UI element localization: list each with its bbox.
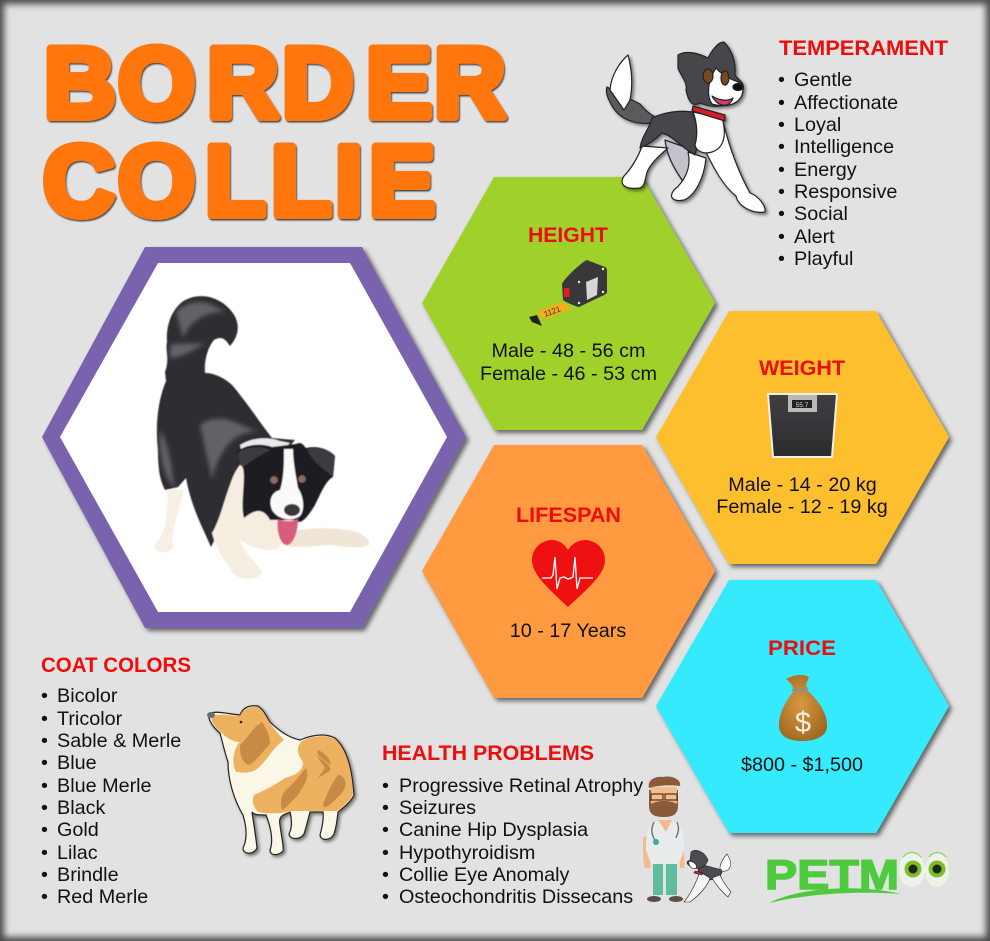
- icon: tape measure: 1121: [543, 304, 562, 319]
- list: coat colors: Blue: [57, 752, 97, 774]
- list: temperament traits: Loyal: [794, 114, 841, 136]
- list: temperament traits: Social: [794, 203, 848, 225]
- health problems: [382, 742, 643, 908]
- list: coat colors: •: [41, 775, 48, 797]
- list: temperament traits: Playful: [794, 248, 853, 270]
- list: health problems: Seizures: [399, 797, 476, 819]
- icon: money bag: $: [795, 707, 811, 739]
- list: temperament traits: Intelligence: [794, 136, 894, 158]
- list: coat colors: •: [41, 886, 48, 908]
- list: health problems: •: [382, 819, 389, 841]
- heading: temperament: TEMPERAMENT: [779, 37, 948, 60]
- text: height female: Female - 46 - 53 cm: [480, 363, 657, 385]
- icon: tape measure: [529, 260, 607, 326]
- logo: petmoo: [765, 851, 949, 903]
- panel: price: [656, 580, 949, 833]
- title: BORDER: [44, 27, 506, 138]
- temperament: [778, 37, 948, 270]
- list: temperament traits: Affectionate: [794, 92, 898, 114]
- icon: heart with pulse: [532, 540, 605, 607]
- logo wordmark: PETM: [765, 851, 899, 898]
- cartoon dog: [606, 42, 765, 212]
- list: coat colors: Gold: [57, 819, 99, 841]
- list: coat colors: Red Merle: [57, 886, 148, 908]
- list: coat colors: Lilac: [57, 842, 98, 864]
- list: health problems: •: [382, 886, 389, 908]
- text: weight male: Male - 14 - 20 kg: [728, 474, 877, 496]
- icon: bathroom scale: [768, 394, 837, 457]
- text: height male: Male - 48 - 56 cm: [492, 340, 645, 362]
- coat colors: [41, 654, 191, 908]
- list: temperament traits: •: [778, 203, 785, 225]
- list: temperament traits: •: [778, 114, 785, 136]
- photo: border collie play bow: [155, 296, 369, 579]
- heading: coat colors: COAT COLORS: [41, 654, 191, 677]
- list: health problems: •: [382, 775, 389, 797]
- list: coat colors: •: [41, 797, 48, 819]
- list: coat colors: Sable & Merle: [57, 730, 181, 752]
- list: coat colors: Tricolor: [57, 708, 123, 730]
- list: health problems: •: [382, 797, 389, 819]
- list: temperament traits: •: [778, 159, 785, 181]
- list: coat colors: Blue Merle: [57, 775, 152, 797]
- panel: lifespan: [422, 445, 715, 698]
- list: temperament traits: Energy: [794, 159, 857, 181]
- icon: bathroom scale: 55.7: [796, 402, 809, 409]
- panel: height: [422, 177, 715, 430]
- text: weight female: Female - 12 - 19 kg: [716, 496, 888, 518]
- list: health problems: Hypothyroidism: [399, 842, 535, 864]
- list: temperament traits: •: [778, 181, 785, 203]
- heading: height: HEIGHT: [528, 224, 608, 247]
- list: temperament traits: •: [778, 136, 785, 158]
- list: temperament traits: Alert: [794, 226, 835, 248]
- list: temperament traits: •: [778, 69, 785, 91]
- illustration: small dog: [684, 850, 731, 902]
- heading: price: PRICE: [768, 637, 836, 660]
- list: coat colors: •: [41, 864, 48, 886]
- title: COLLIE: [43, 125, 435, 236]
- heading: health problems: HEALTH PROBLEMS: [382, 742, 594, 765]
- text: price value: $800 - $1,500: [741, 754, 863, 776]
- panel: weight: [656, 311, 949, 564]
- list: coat colors: •: [41, 819, 48, 841]
- heading: lifespan: LIFESPAN: [516, 504, 621, 527]
- list: temperament traits: Responsive: [794, 181, 897, 203]
- list: health problems: •: [382, 864, 389, 886]
- icon: money bag: [779, 675, 827, 741]
- list: coat colors: •: [41, 685, 48, 707]
- illustration: sable collie: [207, 706, 354, 855]
- list: temperament traits: •: [778, 226, 785, 248]
- title: [43, 27, 506, 236]
- list: coat colors: •: [41, 730, 48, 752]
- logo eyes: [899, 852, 949, 887]
- list: health problems: Progressive Retinal Atrophy: [399, 775, 643, 797]
- list: temperament traits: [778, 69, 898, 270]
- list: coat colors: [41, 685, 181, 908]
- panel: photo hexagon: [42, 247, 466, 628]
- illustration: vet: [643, 777, 684, 902]
- list: temperament traits: Gentle: [794, 69, 852, 91]
- text: lifespan value: 10 - 17 Years: [510, 620, 626, 642]
- list: temperament traits: •: [778, 92, 785, 114]
- logo swoosh: [769, 888, 901, 903]
- list: temperament traits: •: [778, 248, 785, 270]
- list: coat colors: Black: [57, 797, 105, 819]
- list: health problems: •: [382, 842, 389, 864]
- list: health problems: Collie Eye Anomaly: [399, 864, 570, 886]
- list: coat colors: •: [41, 708, 48, 730]
- heading: weight: WEIGHT: [759, 357, 845, 380]
- list: health problems: Osteochondritis Dissecans: [399, 886, 633, 908]
- list: coat colors: •: [41, 842, 48, 864]
- list: health problems: [382, 775, 643, 908]
- list: coat colors: Bicolor: [57, 685, 118, 707]
- list: coat colors: Brindle: [57, 864, 119, 886]
- list: coat colors: •: [41, 752, 48, 774]
- list: health problems: Canine Hip Dysplasia: [399, 819, 588, 841]
